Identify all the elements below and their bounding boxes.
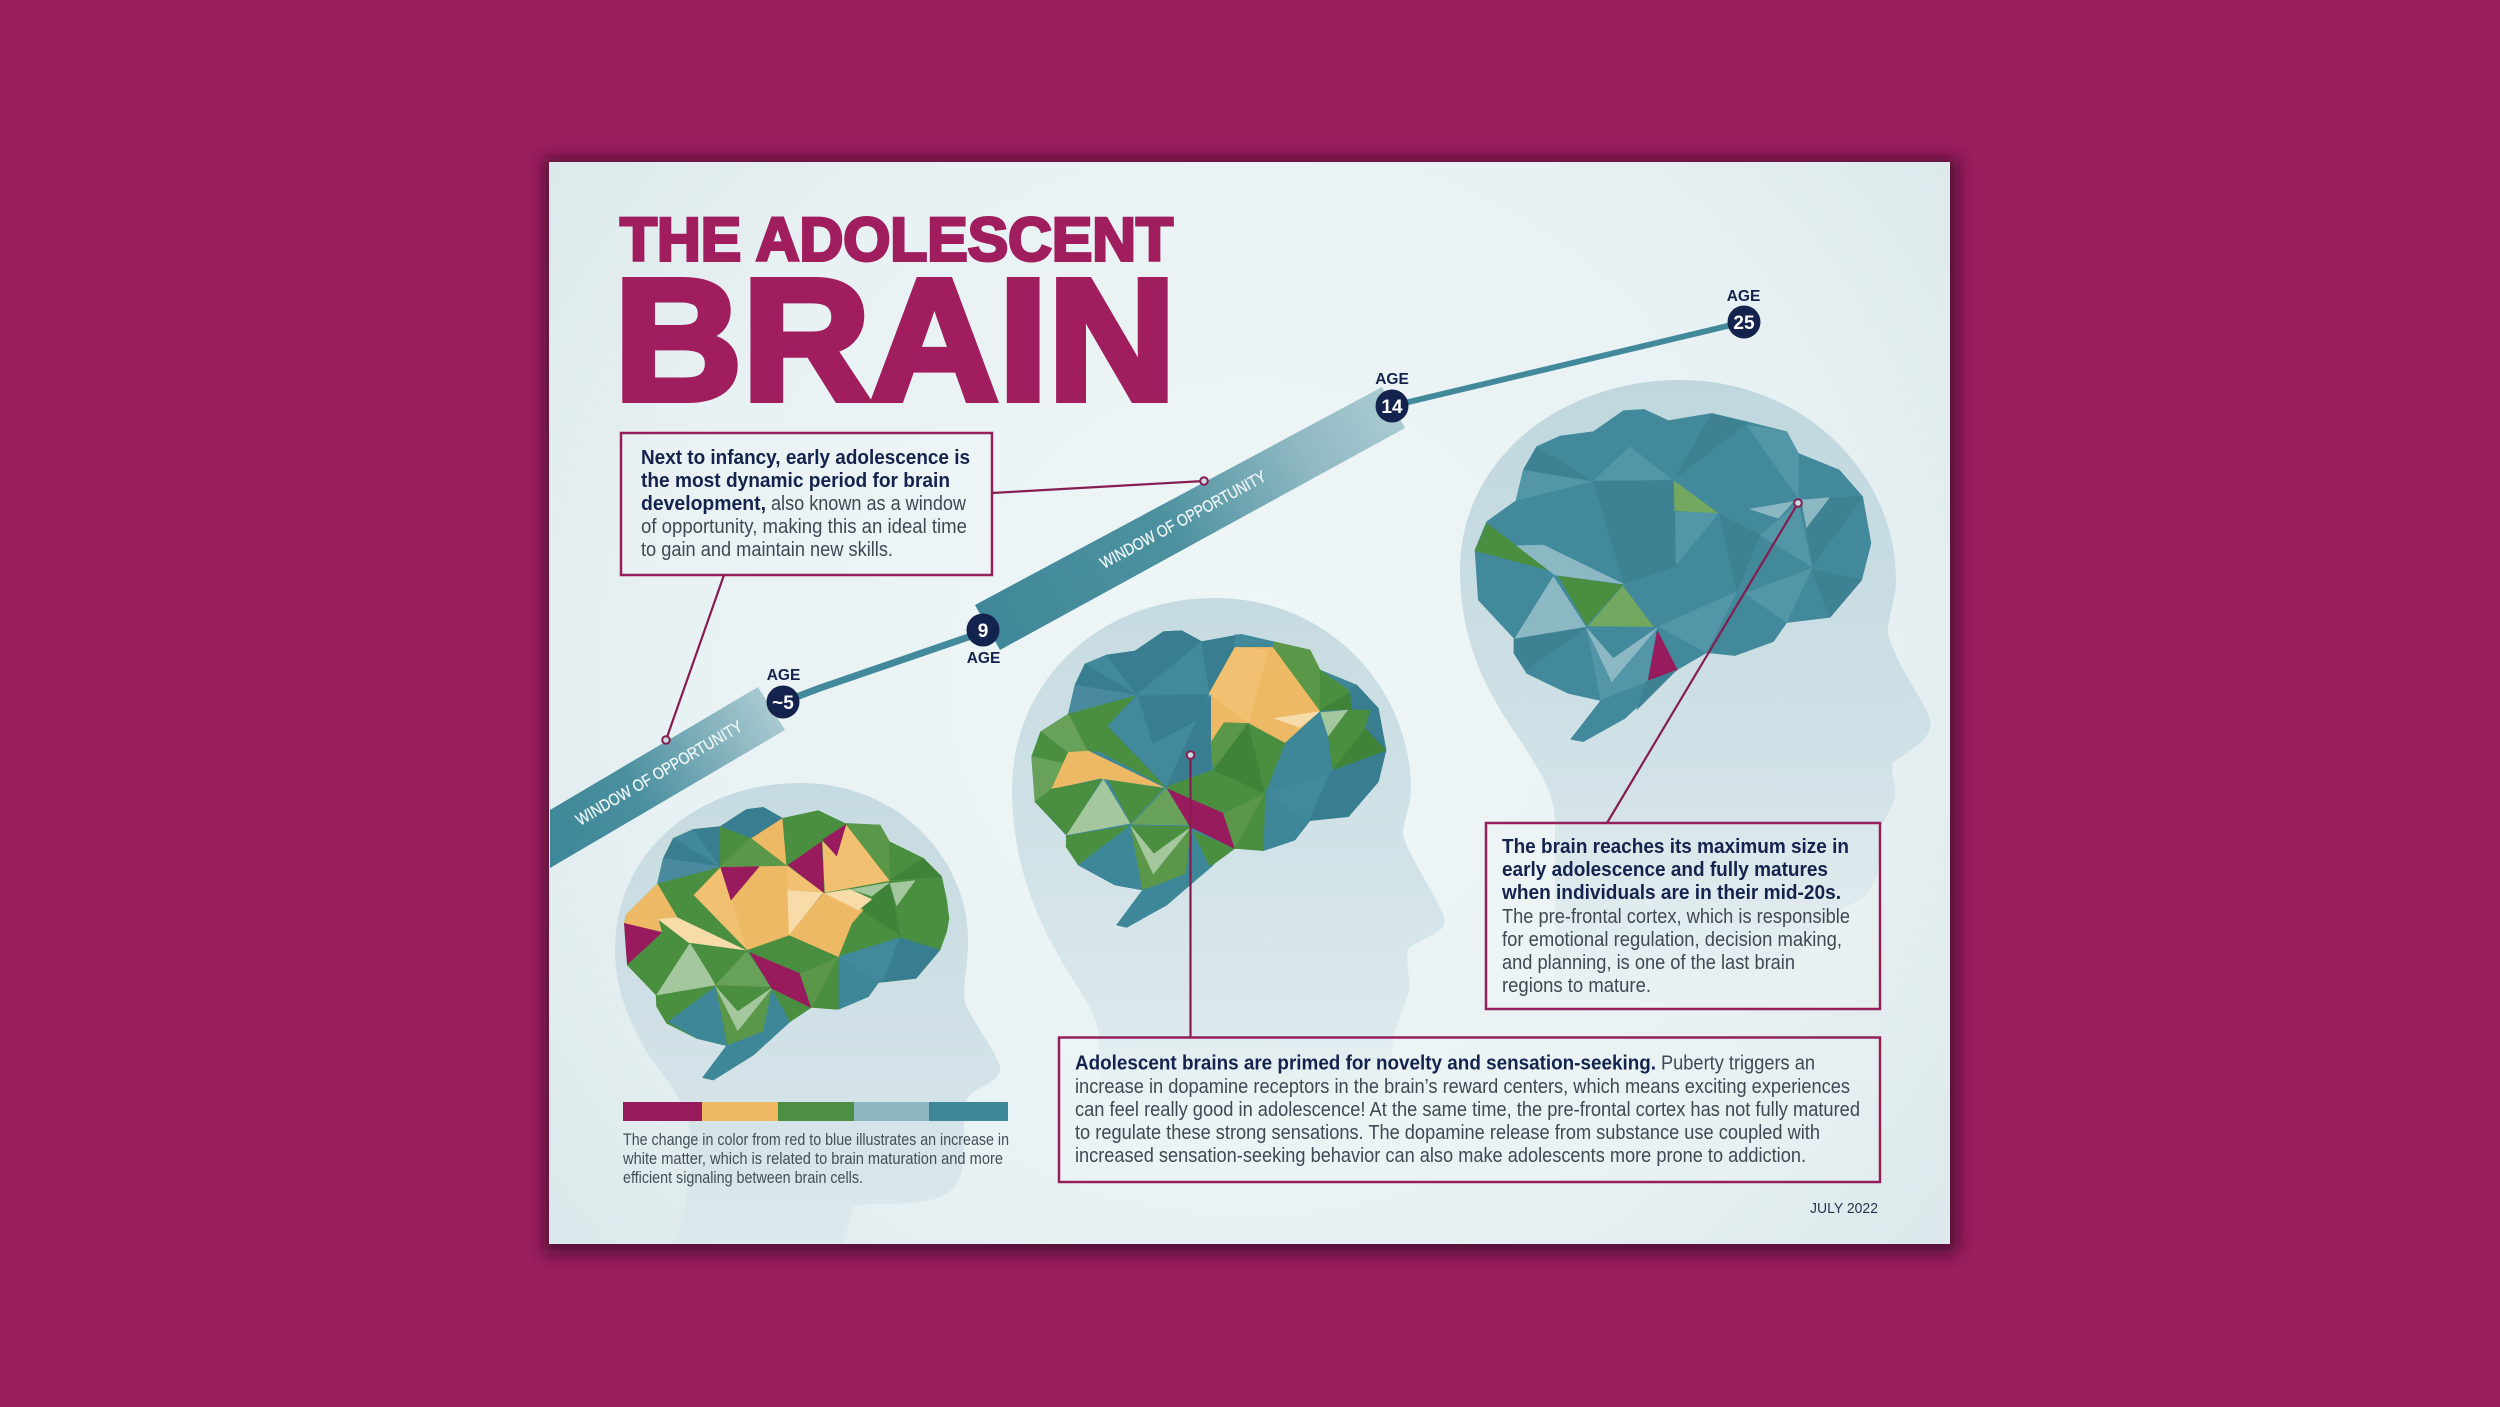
band: first window of opportunity: WINDOW OF OPPORTUNITY	[573, 718, 746, 829]
marker: age 5	[766, 667, 800, 718]
callout: novelty and sensation-seeking	[1059, 751, 1880, 1182]
title: BRAIN	[614, 242, 1176, 436]
callout: maximum size and maturation: and planning, is one of the last brain	[1502, 952, 1795, 974]
callout: window of opportunity: development,	[641, 493, 766, 515]
marker: age 9	[966, 614, 1000, 667]
connector to lower window band	[662, 575, 724, 744]
callout: novelty and sensation-seeking: can feel really good in adolescence! At the same time, the pre-frontal cortex has not fully matured	[1075, 1099, 1860, 1121]
callout: maximum size and maturation	[1486, 499, 1880, 1009]
marker: age 25: AGE	[1727, 288, 1760, 305]
legend: colour scale	[623, 1102, 1008, 1121]
callout: novelty and sensation-seeking: increased sensation-seeking behavior can also make adolescents more prone to addiction.	[1075, 1145, 1806, 1167]
callout: novelty and sensation-seeking: to regulate these strong sensations. The dopamine release from substance use coupled with	[1075, 1122, 1820, 1144]
marker: age 5: ~5	[772, 693, 794, 714]
connector to pre-frontal cortex	[1607, 499, 1802, 823]
timeline segment: age 9 to age 5	[783, 632, 983, 702]
timeline segment: age 14 to age 25	[1392, 319, 1744, 409]
panel: infographic sheet	[549, 162, 1950, 1244]
callout: maximum size and maturation: for emotional regulation, decision making,	[1502, 929, 1842, 951]
band: second window of opportunity	[975, 387, 1405, 650]
callout: novelty and sensation-seeking: Adolescent brains are primed for novelty and sensation-seeking.	[1075, 1052, 1656, 1074]
date: JULY 2022	[1810, 1200, 1878, 1217]
callout: maximum size and maturation: The pre-frontal cortex, which is responsible	[1502, 906, 1850, 928]
marker: age 5: AGE	[767, 667, 800, 684]
callout: maximum size and maturation: when individuals are in their mid-20s.	[1501, 882, 1841, 904]
callout: window of opportunity: the most dynamic period for brain	[641, 470, 950, 492]
panel shadow	[544, 158, 1958, 1254]
marker: age 25	[1727, 288, 1760, 338]
marker: age 14	[1375, 371, 1409, 422]
legend caption	[622, 1131, 1009, 1187]
callout: window of opportunity: also known as a window	[771, 493, 966, 515]
brain: age 5	[624, 807, 949, 1080]
callout: maximum size and maturation: The brain reaches its maximum size in	[1502, 836, 1849, 858]
title: THE ADOLESCENT	[620, 206, 1173, 274]
head silhouette: age 25	[1460, 380, 1931, 1000]
brain: age 25	[1475, 409, 1871, 742]
legend caption: The change in color from red to blue illustrates an increase in	[623, 1131, 1009, 1149]
band: first window of opportunity	[550, 687, 785, 868]
callout: window of opportunity: Next to infancy, early adolescence is	[641, 447, 970, 469]
marker: age 9: 9	[978, 621, 988, 642]
callout: maximum size and maturation: early adolescence and fully matures	[1502, 859, 1828, 881]
callout: maximum size and maturation: regions to mature.	[1502, 975, 1651, 997]
callout: window of opportunity: to gain and maintain new skills.	[641, 539, 893, 561]
legend caption: white matter, which is related to brain maturation and more	[622, 1150, 1003, 1168]
connector to reward center	[1187, 751, 1194, 1037]
head silhouette: age 14	[1012, 598, 1445, 1100]
callout: novelty and sensation-seeking: Puberty triggers an	[1661, 1052, 1815, 1074]
band: second window of opportunity: WINDOW OF OPPORTUNITY	[1097, 468, 1269, 573]
marker: age 14: AGE	[1375, 371, 1409, 388]
brain: age 14	[1032, 631, 1386, 927]
marker: age 9: AGE	[967, 650, 1000, 667]
marker: age 14: 14	[1381, 397, 1403, 418]
marker: age 25: 25	[1733, 313, 1755, 334]
legend caption: efficient signaling between brain cells.	[623, 1169, 863, 1187]
timeline: window of opportunity and ages	[550, 288, 1760, 868]
head silhouette: age 5	[615, 783, 1000, 1243]
connector to upper window band	[992, 477, 1208, 493]
callout: window of opportunity	[621, 433, 1208, 744]
callout: novelty and sensation-seeking: increase in dopamine receptors in the brain’s reward centers, which means exciting experiences	[1075, 1076, 1850, 1098]
callout: window of opportunity: of opportunity, making this an ideal time	[641, 516, 967, 538]
